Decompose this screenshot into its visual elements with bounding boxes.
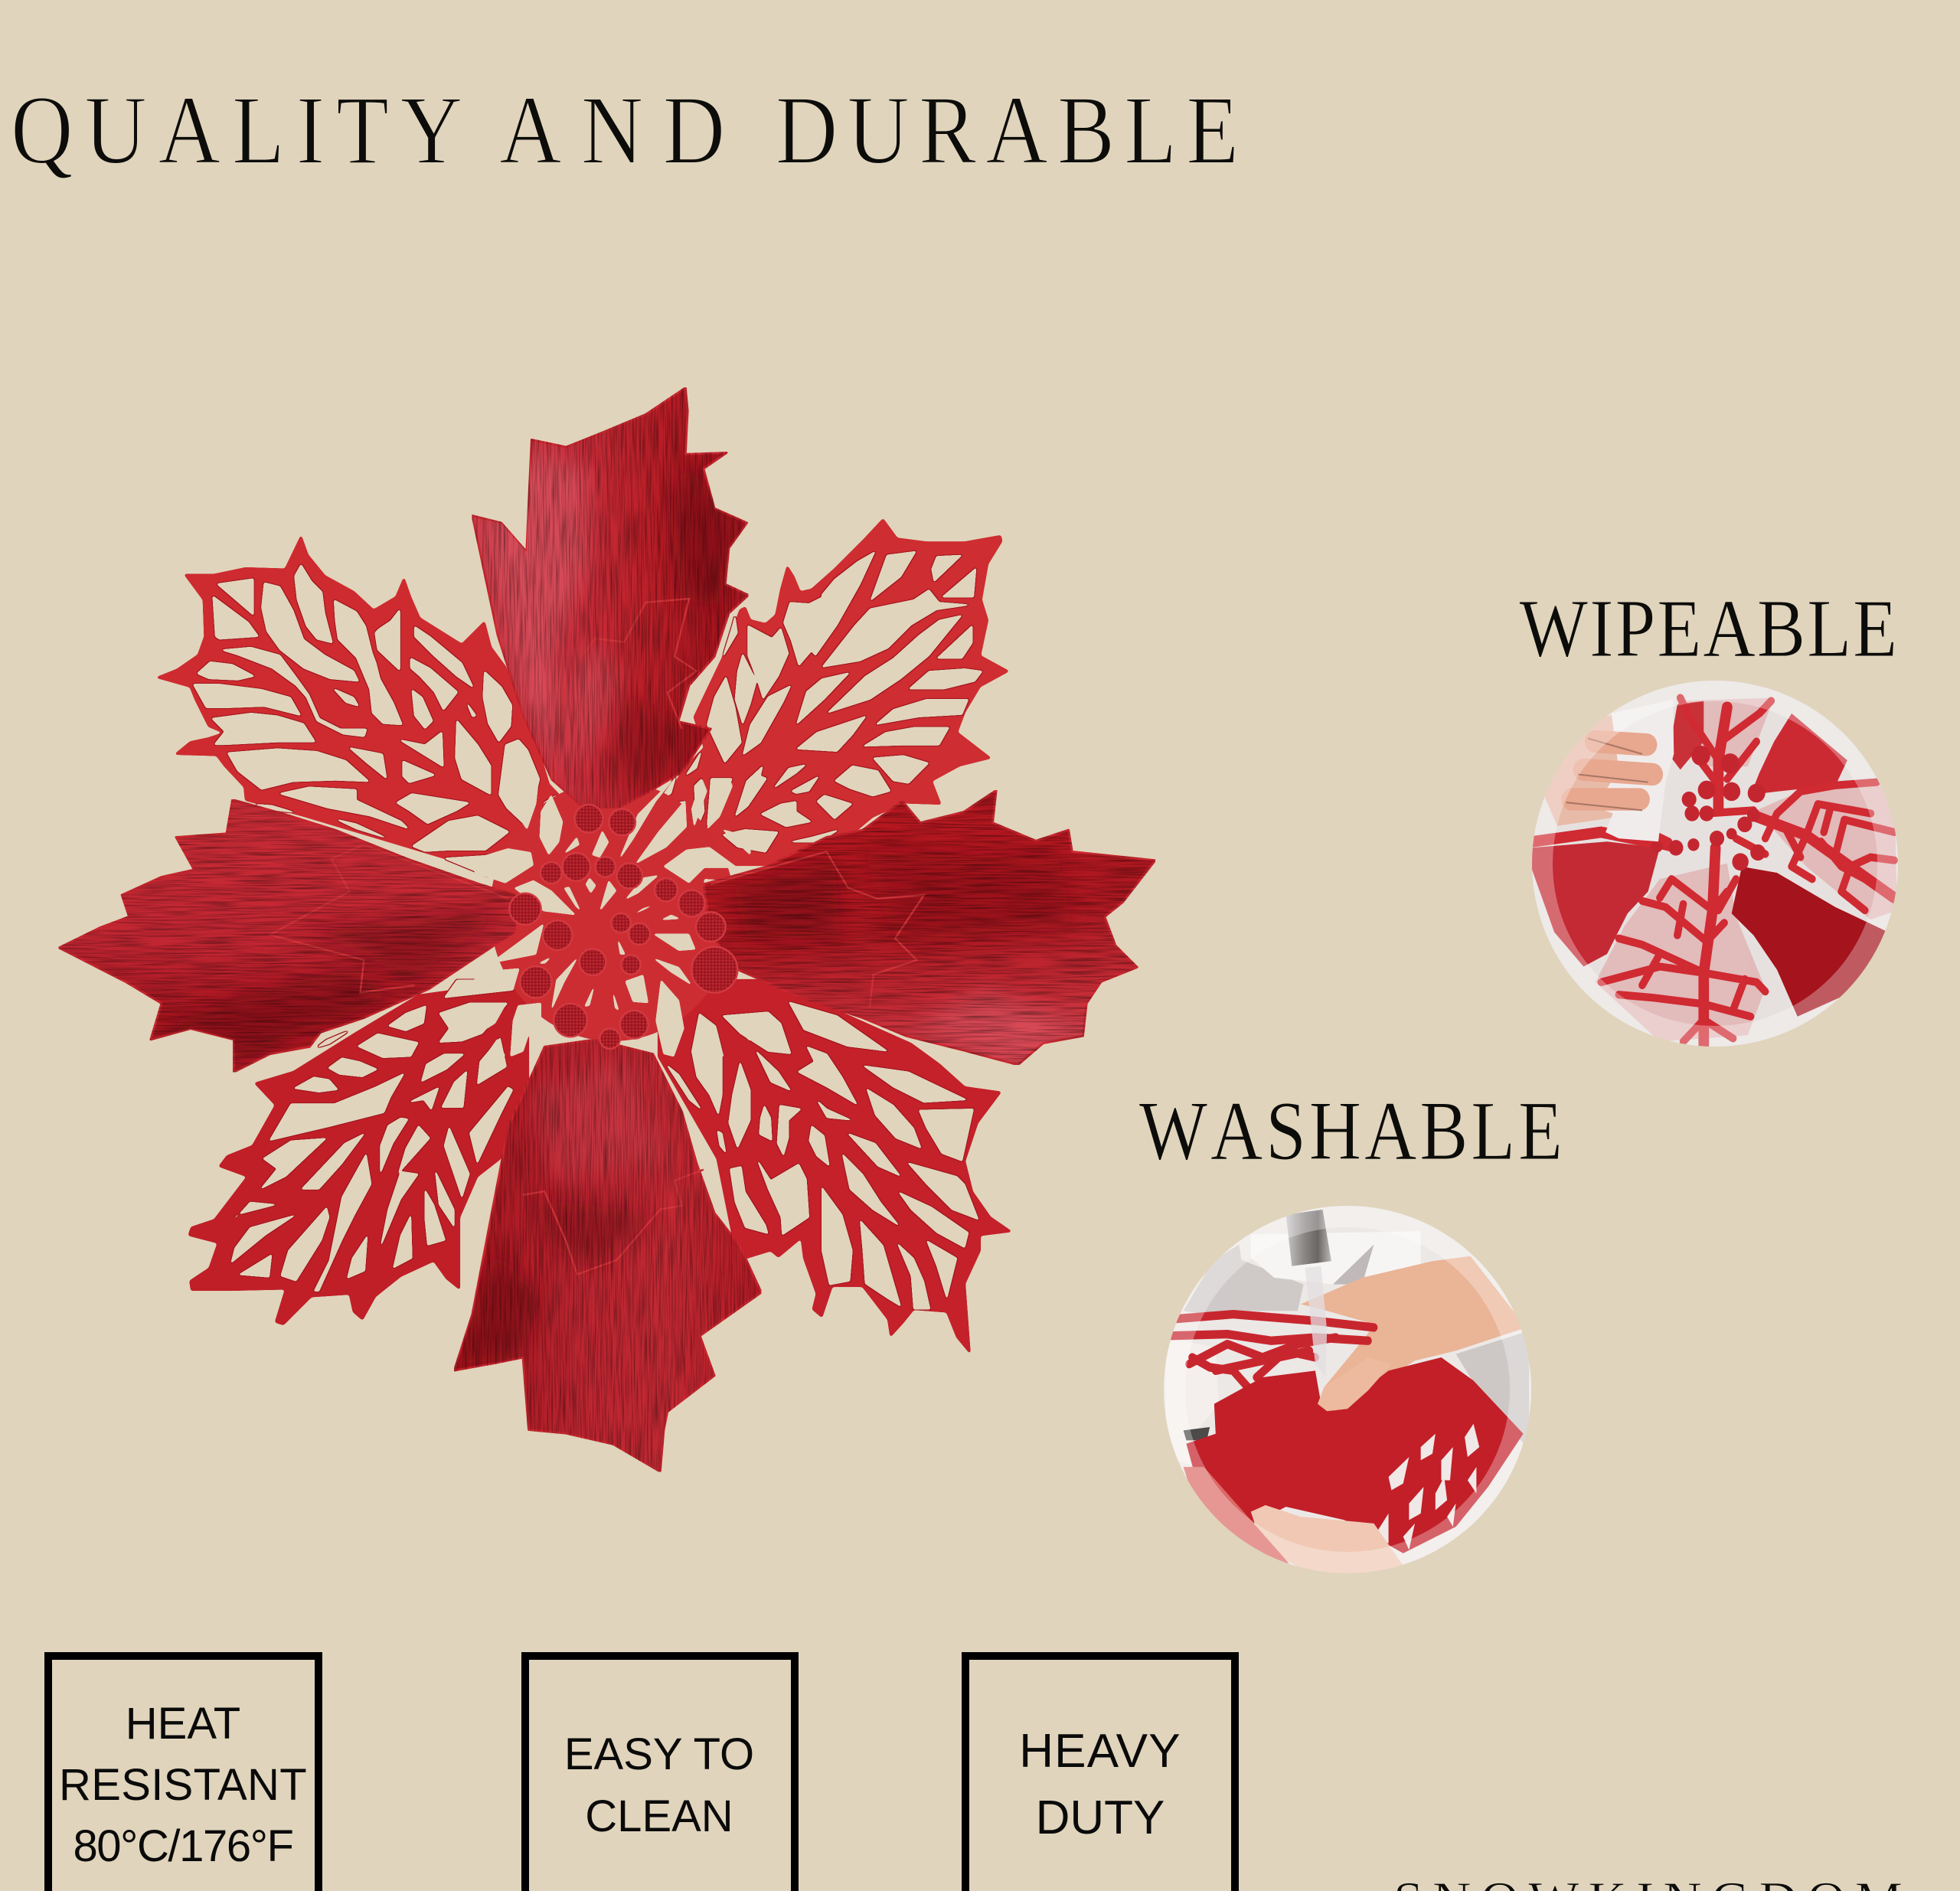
solid leaves <box>59 387 1155 1471</box>
mat cut-outs <box>1374 1424 1479 1550</box>
sink background <box>1166 1231 1529 1467</box>
badge text: HEAT <box>126 1699 240 1749</box>
badge: easy to clean <box>525 1656 795 1891</box>
badge frame <box>525 1656 795 1891</box>
red mat body <box>1187 1357 1524 1553</box>
hand in photo <box>1540 699 1674 841</box>
badge: heat resistant <box>48 1656 318 1891</box>
lace cut-outs: upper right <box>658 551 982 855</box>
inner leaf line: top <box>552 599 697 779</box>
badge: heavy duty <box>965 1656 1235 1891</box>
heading: washable: WASHABLE <box>1139 1085 1563 1178</box>
solid leaf: top <box>472 387 748 808</box>
badge text: 80°C/176°F <box>73 1821 293 1871</box>
photo: wiping the placemat <box>1531 680 1899 1049</box>
lace leaf: lower left <box>189 980 528 1324</box>
inner leaf line: right <box>710 851 924 1007</box>
lace tint in photo <box>1596 697 1897 1041</box>
berries in photo <box>1651 746 1766 870</box>
hand washing <box>1301 1256 1521 1390</box>
solid petals in photo <box>1531 701 1888 1017</box>
badge frame <box>965 1656 1235 1891</box>
inner leaf line: bottom <box>523 1170 704 1275</box>
badge text: DUTY <box>1036 1791 1165 1844</box>
photo: washing the placemat <box>1163 1206 1532 1576</box>
shading: top leaf <box>487 454 740 794</box>
lace leaf: lower right <box>658 980 1011 1353</box>
lace leaf: upper right <box>658 519 1008 865</box>
title: AND <box>499 77 786 185</box>
solid leaf: right <box>704 790 1155 1065</box>
badge text: HEAVY <box>1019 1725 1181 1778</box>
thumb <box>1318 1357 1391 1411</box>
badge text: EASY TO <box>564 1729 754 1779</box>
lace leaf: upper left <box>157 537 559 893</box>
water stream <box>1305 1266 1328 1362</box>
faded red lower left <box>1184 1467 1289 1563</box>
lace veins in photo <box>1534 697 1894 1045</box>
poinsettia placemat <box>59 387 1155 1471</box>
shading: right leaf <box>733 851 1080 1054</box>
centre hub lace <box>475 768 750 1057</box>
faucet <box>1286 1210 1331 1266</box>
badge text: RESISTANT <box>59 1760 307 1810</box>
heading: wipeable: WIPEABLE <box>1519 583 1897 674</box>
berries <box>509 805 737 1049</box>
upper lace of the mat <box>1171 1315 1374 1390</box>
lace cut-outs: lower right <box>666 1001 978 1309</box>
title: DURABLE <box>776 77 1248 185</box>
hub cut-outs <box>475 768 750 1057</box>
translucent ring <box>1542 691 1888 1037</box>
translucent ring <box>1174 1217 1521 1563</box>
lace cut-outs: lower left <box>227 980 518 1292</box>
inner leaf line: left <box>270 844 508 992</box>
shading: left leaf <box>162 910 508 1061</box>
lower hand <box>1251 1505 1406 1576</box>
solid leaf: left <box>59 799 516 1072</box>
lace cut-outs: upper left <box>193 564 559 879</box>
badge frame <box>48 1656 318 1891</box>
shading: bottom leaf <box>458 1061 668 1365</box>
badge text: CLEAN <box>585 1791 733 1841</box>
solid leaf: bottom <box>454 1040 761 1471</box>
title: QUALITY <box>11 77 507 185</box>
